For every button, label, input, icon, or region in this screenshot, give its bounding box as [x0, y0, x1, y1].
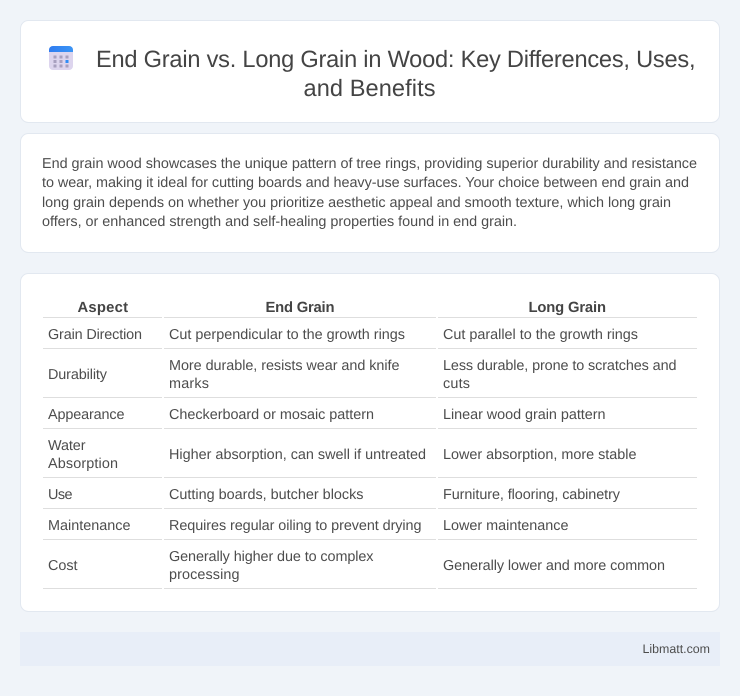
table header row	[78, 300, 606, 316]
row: maintenance: Lower maintenance	[443, 518, 568, 534]
title	[96, 47, 696, 102]
title: End Grain vs. Long Grain in Wood: Key Differences, Uses,	[96, 47, 696, 73]
row: use: Cutting boards, butcher blocks	[169, 487, 364, 503]
row: maintenance: Maintenance	[48, 518, 130, 534]
table header row: Aspect	[78, 300, 128, 316]
row: durability: Less durable, prone to scratches and	[443, 358, 676, 374]
icon: calendar	[49, 46, 73, 70]
text block: introduction: End grain wood showcases the unique pattern of tree rings, providing superior durability and resistance	[42, 156, 697, 172]
row: cost	[48, 549, 665, 583]
panel: introduction	[20, 134, 720, 252]
row: water absorption: Absorption	[48, 456, 118, 472]
row: durability: More durable, resists wear and knife	[169, 358, 400, 374]
row: grain direction: Grain Direction	[48, 327, 142, 343]
row: appearance: Linear wood grain pattern	[443, 407, 606, 423]
row: durability: cuts	[443, 376, 470, 392]
panel: comparison table	[20, 274, 720, 612]
row: use: Furniture, flooring, cabinetry	[443, 487, 621, 503]
row: cost: Generally higher due to complex	[169, 549, 374, 565]
row: durability	[48, 358, 676, 392]
footer	[20, 632, 720, 666]
text block: introduction: long grain depends on whether you prioritize aesthetic appeal and smooth texture, which long grain	[42, 195, 671, 211]
row: water absorption: Water	[48, 438, 86, 454]
row: cost: Cost	[48, 558, 78, 574]
row: durability: Durability	[48, 367, 108, 383]
row: water absorption: Lower absorption, more stable	[443, 447, 636, 463]
row: maintenance	[48, 518, 568, 534]
row: use	[48, 487, 621, 503]
row: appearance: Checkerboard or mosaic pattern	[169, 407, 374, 423]
row: grain direction: Cut parallel to the growth rings	[443, 327, 638, 343]
footer: Libmatt.com	[642, 642, 710, 656]
text block: introduction: offers, or enhanced strength and self-healing properties found in end grain.	[42, 214, 517, 230]
text block: introduction	[42, 156, 697, 230]
row: water absorption: Higher absorption, can swell if untreated	[169, 447, 426, 463]
row: grain direction: Cut perpendicular to the growth rings	[169, 327, 405, 343]
row: maintenance: Requires regular oiling to prevent drying	[169, 518, 422, 534]
row: water absorption	[48, 438, 636, 472]
row: grain direction	[48, 327, 638, 343]
text block: introduction: to wear, making it ideal for cutting boards and heavy-use surfaces. Your choice between end grain and	[42, 175, 689, 191]
row: appearance: Appearance	[48, 407, 124, 423]
row: cost: processing	[169, 567, 240, 583]
row: appearance	[48, 407, 606, 423]
title: and Benefits	[304, 76, 436, 102]
row: use: Use	[48, 487, 72, 503]
row: cost: Generally lower and more common	[443, 558, 665, 574]
row: durability: marks	[169, 376, 209, 392]
table header row: End Grain	[266, 300, 334, 316]
table header row: Long Grain	[528, 300, 606, 316]
panel: header	[20, 20, 720, 122]
